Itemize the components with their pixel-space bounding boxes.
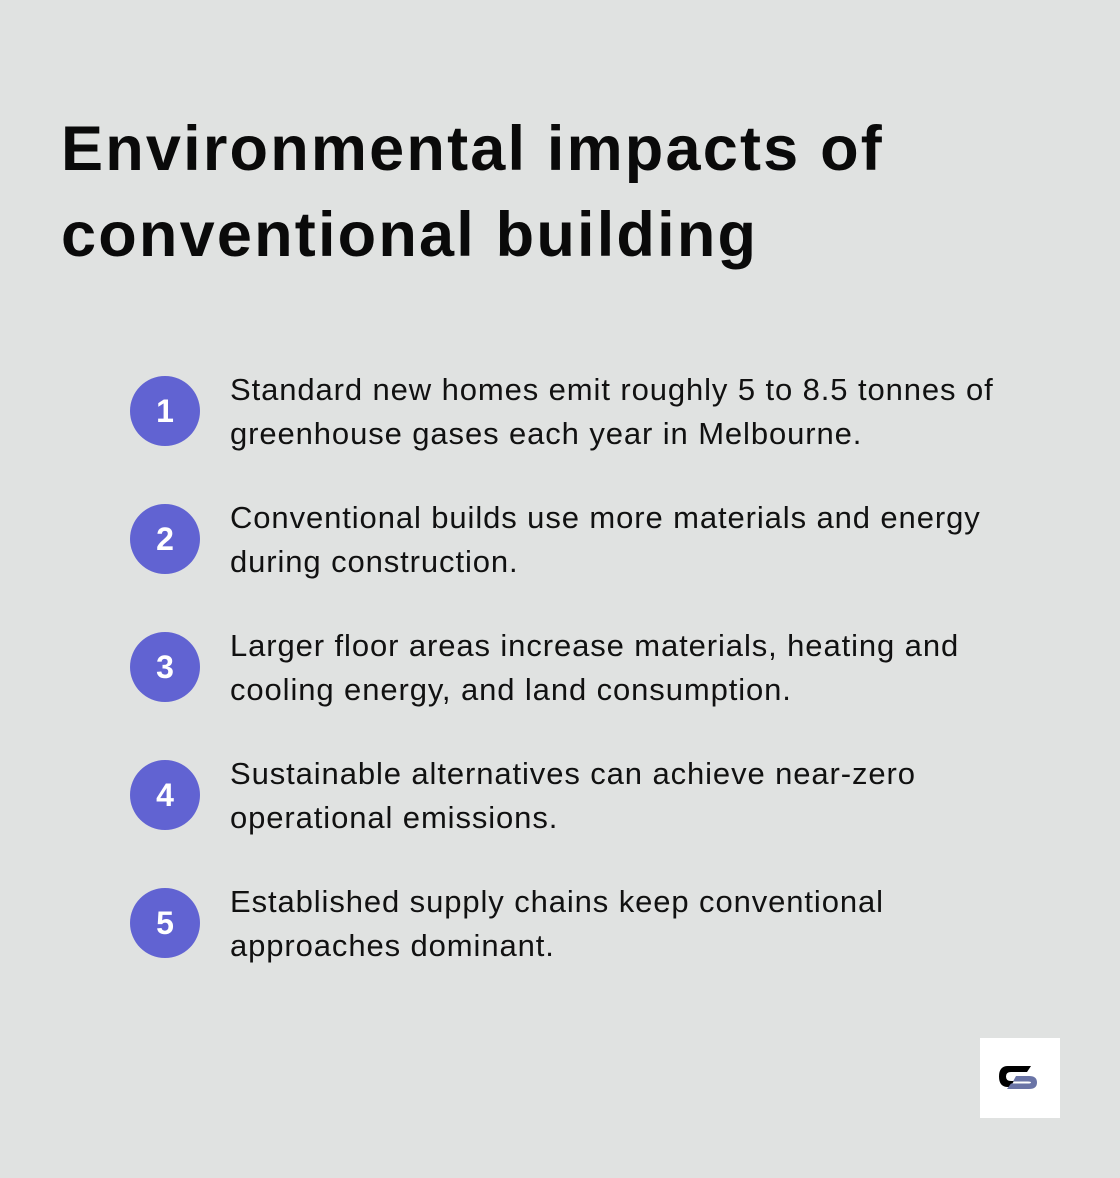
item 4	[130, 756, 916, 835]
text 2: during construction.	[230, 544, 519, 579]
logo	[980, 1038, 1060, 1118]
text 3: Larger floor areas increase materials, heating and	[230, 628, 959, 663]
item 2	[130, 500, 981, 579]
text 4: operational emissions.	[230, 800, 558, 835]
number badge 1: 1	[156, 393, 174, 429]
text 1: greenhouse gases each year in Melbourne.	[230, 416, 862, 451]
number badge 3: 3	[156, 649, 174, 685]
text 5: Established supply chains keep conventional	[230, 884, 884, 919]
number badge 5	[130, 888, 200, 958]
text 3: cooling energy, and land consumption.	[230, 672, 792, 707]
number badge 5: 5	[156, 905, 174, 941]
title: Environmental impacts of	[61, 114, 884, 184]
text 4: Sustainable alternatives can achieve near-zero	[230, 756, 916, 791]
number badge 2	[130, 504, 200, 574]
number badge 4: 4	[156, 777, 174, 813]
text 1: Standard new homes emit roughly 5 to 8.5 tonnes of	[230, 372, 994, 407]
text 4	[230, 756, 916, 835]
number badge 4	[130, 760, 200, 830]
text 5	[230, 884, 884, 963]
number badge 2: 2	[156, 521, 174, 557]
item 1	[130, 372, 994, 451]
title: conventional building	[61, 200, 758, 270]
title	[61, 114, 884, 270]
text 1	[230, 372, 994, 451]
text 5: approaches dominant.	[230, 928, 555, 963]
number badge 1	[130, 376, 200, 446]
text 2: Conventional builds use more materials and energy	[230, 500, 981, 535]
text 2	[230, 500, 981, 579]
text 3	[230, 628, 959, 707]
number badge 3	[130, 632, 200, 702]
item 3	[130, 628, 959, 707]
item 5	[130, 884, 884, 963]
